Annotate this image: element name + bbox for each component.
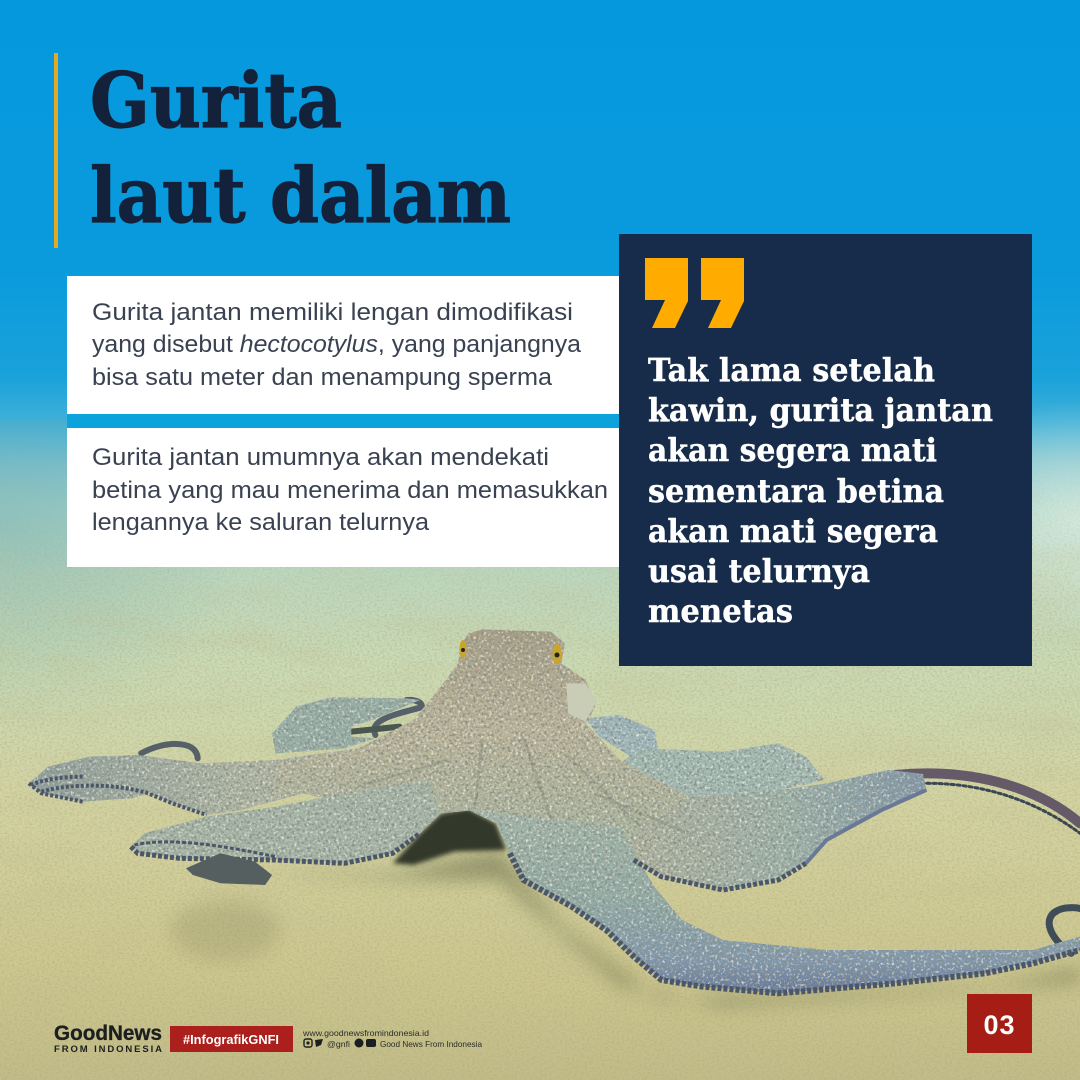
page number <box>967 994 1032 1053</box>
text panel: mating behaviour: lengannya ke saluran telurnya <box>92 509 429 536</box>
footer contact details: Good News From Indonesia <box>380 1039 482 1049</box>
back left arm <box>272 697 420 753</box>
text panel: hectocotylus: yang disebut hectocotylus, yang panjangnya <box>92 331 581 358</box>
siphon <box>566 683 597 722</box>
left upper arm <box>29 720 482 815</box>
hashtag badge: #InfografikGNFI <box>183 1033 279 1047</box>
footer contact details: @gnfi <box>327 1039 350 1049</box>
quote text: akan mati segera <box>648 512 938 550</box>
icon: quotation marks <box>645 258 744 328</box>
text panel: mating behaviour: Gurita jantan umumnya akan mendekati <box>92 444 549 471</box>
panel: quote <box>619 234 1032 666</box>
text panel: mating behaviour: betina yang mau menerima dan memasukkan <box>92 477 608 504</box>
background: sea and sandy floor <box>0 324 1080 1080</box>
text panel: mating behaviour <box>67 428 619 567</box>
right arm <box>585 757 926 890</box>
text panel: hectocotylus <box>67 276 619 414</box>
icon: youtube <box>366 1039 376 1047</box>
curled arm tips in the background <box>141 700 1080 953</box>
quote text: Tak lama setelah <box>648 351 935 389</box>
footer contact details: www.goodnewsfromindonesia.id <box>302 1028 429 1038</box>
footer contact details <box>302 1028 482 1049</box>
streaks along the mantle <box>358 737 689 833</box>
title <box>90 56 511 240</box>
hashtag badge <box>170 1026 293 1052</box>
text panel: hectocotylus: bisa satu meter dan menampung sperma <box>92 364 552 391</box>
illustration: octopus on the sand <box>29 629 1080 1006</box>
lower arm segment with curled sucker tip <box>186 853 272 885</box>
footer logo: GoodNews From Indonesia <box>54 1022 162 1055</box>
icon: twitter <box>315 1039 323 1047</box>
mantle and head <box>276 629 689 847</box>
lobe behind head <box>585 715 658 758</box>
page number: 03 <box>983 1010 1016 1040</box>
front long arm <box>468 787 1080 993</box>
title accent bar <box>54 53 58 248</box>
arm underside suckers <box>29 777 1080 993</box>
divider strip between text panels <box>67 414 619 428</box>
quote text: menetas <box>648 592 793 630</box>
shadow under octopus <box>270 850 1080 1006</box>
title: Gurita <box>90 56 342 145</box>
quote text: akan segera mati <box>648 431 937 469</box>
text panel: hectocotylus: Gurita jantan memiliki lengan dimodifikasi <box>92 299 573 326</box>
icon: facebook <box>354 1038 364 1048</box>
dark cavity under the mantle <box>393 808 506 865</box>
eyes <box>460 640 562 664</box>
footer logo: GoodNews From Indonesia: GoodNews <box>54 1022 162 1045</box>
back right arm <box>620 743 824 797</box>
left lower arm <box>131 767 482 863</box>
footer logo: GoodNews From Indonesia: FROM INDONESIA <box>54 1044 162 1055</box>
quote text: kawin, gurita jantan <box>648 391 993 429</box>
quote text: sementara betina <box>648 472 944 510</box>
quote text <box>648 351 993 630</box>
quote text: usai telurnya <box>648 552 870 590</box>
title: laut dalam <box>90 151 511 240</box>
icon: instagram <box>304 1039 312 1047</box>
